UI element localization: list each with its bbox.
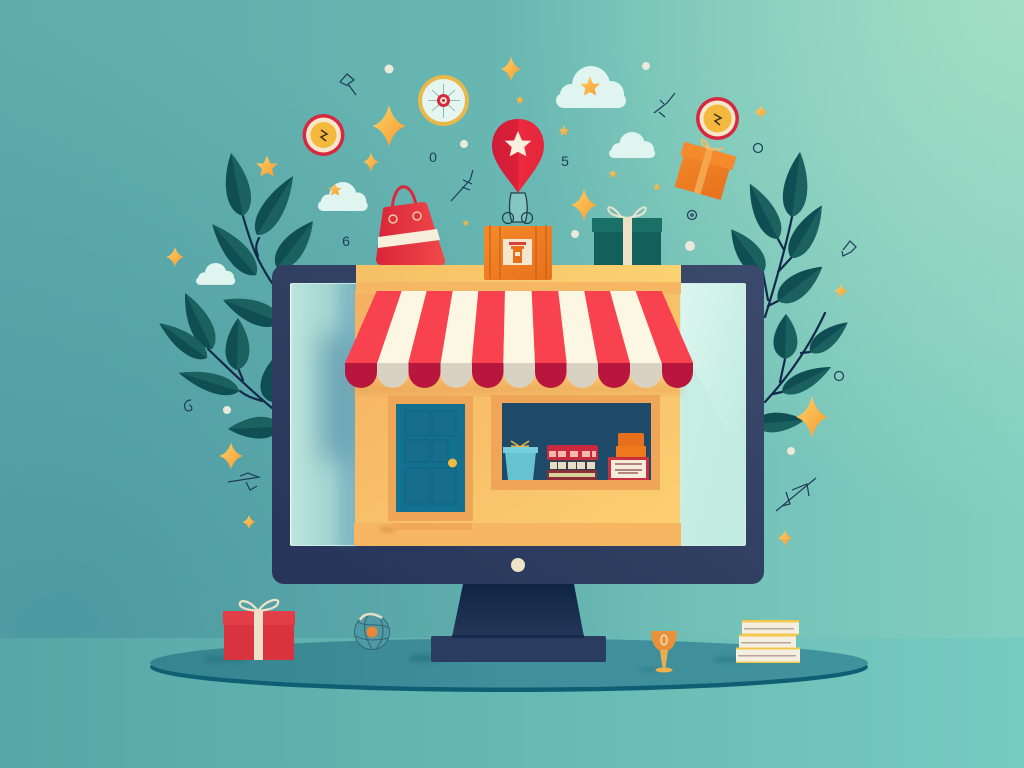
doodle digits: 6: [342, 233, 350, 249]
icon: book stack: [736, 620, 800, 663]
doodle digits: 5: [561, 153, 569, 169]
window gift: [503, 441, 538, 480]
icon: coin left: [302, 114, 344, 156]
icon: small cloud: [609, 132, 655, 158]
icon: shopping bag: [376, 187, 445, 265]
shop window: [491, 395, 660, 490]
shop wall: [355, 290, 680, 530]
awning shadow: [352, 384, 682, 394]
shop base: [354, 523, 681, 546]
awning: [345, 291, 693, 388]
suitcase label: [503, 239, 532, 265]
platform shadows: [205, 654, 755, 671]
window sign: [608, 457, 649, 480]
icon: tilted orange gift: [672, 135, 738, 201]
storefront: [345, 265, 693, 546]
screen: [290, 283, 746, 546]
icon: small globe: [354, 614, 390, 650]
left foliage: [154, 151, 322, 440]
doodle digits: 0: [429, 149, 437, 165]
window orange boxes: [616, 433, 646, 457]
icon: goblet: [651, 631, 677, 672]
monitor stand: [431, 584, 606, 662]
decorative sparkles: [166, 56, 848, 546]
decorative dots: [223, 62, 795, 455]
right foliage: [722, 151, 853, 434]
doodle digits: [342, 149, 569, 249]
icon: red map pin balloon: [492, 119, 544, 224]
icon: red gift box: [223, 600, 295, 660]
platform: [150, 638, 868, 692]
shop roof bar: [356, 265, 681, 294]
icon: left cloud with star: [318, 182, 368, 211]
icon: cloud with star: [556, 66, 626, 108]
floor: [0, 638, 1024, 768]
icon: orange suitcase: [484, 225, 552, 280]
icon: green gift box: [592, 207, 662, 265]
window mini shop: [547, 445, 598, 480]
door: [388, 396, 473, 521]
monitor: [272, 265, 764, 584]
doodle marks: [185, 74, 856, 511]
icon: clock dial: [418, 75, 469, 126]
icon: coin right: [696, 97, 739, 140]
monitor power button: [511, 558, 525, 572]
icon: lower left cloud: [196, 263, 235, 285]
